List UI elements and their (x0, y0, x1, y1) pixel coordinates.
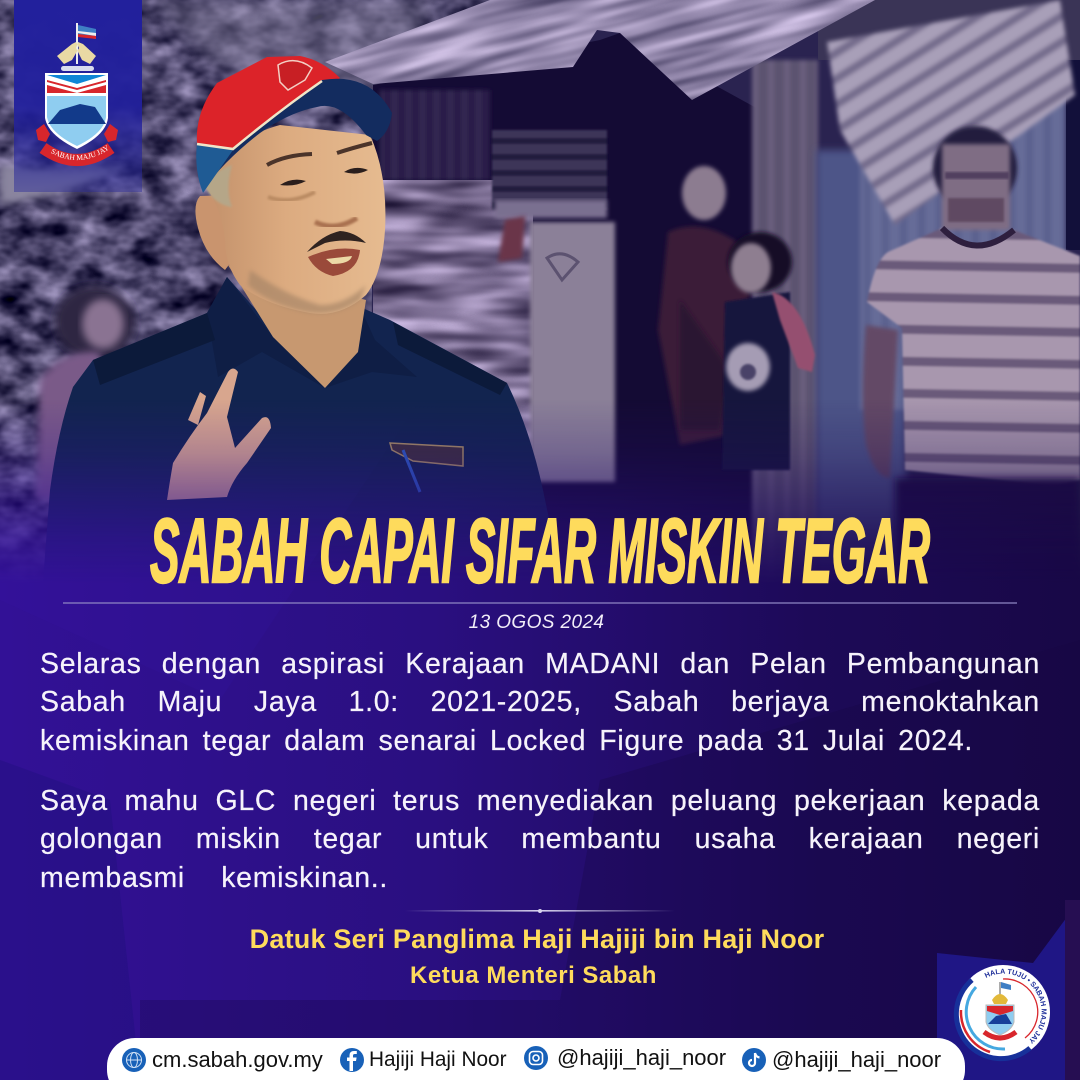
dark house interior (373, 33, 760, 640)
corrugated panel (492, 130, 607, 210)
paragraph one: kemiskinan tegar dalam senarai Locked Figure pada 31 Julai 2024. (40, 725, 973, 757)
man in striped shirt (863, 126, 1080, 638)
facebook name: Hajiji Haji Noor (369, 1048, 507, 1071)
icon: globe (122, 1048, 146, 1072)
tiktok handle: @hajiji_haji_noor (772, 1047, 941, 1072)
attribution name: Datuk Seri Panglima Haji Hajiji bin Haji Noor (250, 924, 824, 954)
tin sheet right (827, 0, 1075, 225)
ear (195, 195, 240, 270)
paragraph two: golongan miskin tegar untuk membantu usaha kerajaan negeri (40, 823, 1040, 855)
attribution role: Ketua Menteri Sabah (410, 962, 657, 989)
paragraph two: membasmi kemiskinan.. (40, 862, 388, 894)
paragraph one: Sabah Maju Jaya 1.0: 2021-2025, Sabah berjaya menoktahkan (40, 686, 1040, 718)
footer contact bar (107, 1038, 965, 1080)
child (722, 232, 815, 470)
moustache and mouth (307, 231, 366, 252)
date: 13 OGOS 2024 (469, 612, 604, 633)
collar (207, 277, 325, 388)
round Hala Tuju badge: HALA TUJU • SABAH MAJU JAYA (984, 968, 1047, 1044)
neck (228, 265, 366, 388)
icon: facebook (340, 1048, 364, 1072)
paragraph one: Selaras dengan aspirasi Kerajaan MADANI dan Pelan Pembangunan (40, 648, 1040, 680)
cap crown (197, 56, 340, 150)
cap brim (203, 79, 392, 190)
icon: tiktok (742, 1048, 766, 1072)
girl on the left (36, 286, 135, 500)
face (205, 125, 385, 314)
background photo: house and family with purple tint (0, 0, 1080, 565)
rubble wall (373, 180, 533, 448)
pocket badge and pen (390, 443, 463, 466)
door post (752, 60, 818, 640)
paragraph two: Saya mahu GLC negeri terus menyediakan peluang pekerjaan kepada (40, 785, 1040, 817)
website: cm.sabah.gov.my (152, 1047, 323, 1072)
brows and eyes (267, 154, 312, 165)
upper wall stripes (380, 90, 490, 180)
uniform shirt (40, 277, 570, 620)
woman in doorway (658, 166, 752, 445)
icon: instagram (524, 1046, 548, 1070)
corrugated roof (325, 0, 875, 100)
purple gradient background and facets (0, 410, 1080, 1080)
paragraph one (40, 648, 1040, 757)
hillside (0, 0, 490, 556)
pale door panel (530, 222, 615, 482)
raised hand (167, 368, 271, 500)
instagram handle: @hajiji_haji_noor (557, 1045, 726, 1070)
blue wall right (816, 150, 906, 640)
nose (315, 218, 357, 226)
